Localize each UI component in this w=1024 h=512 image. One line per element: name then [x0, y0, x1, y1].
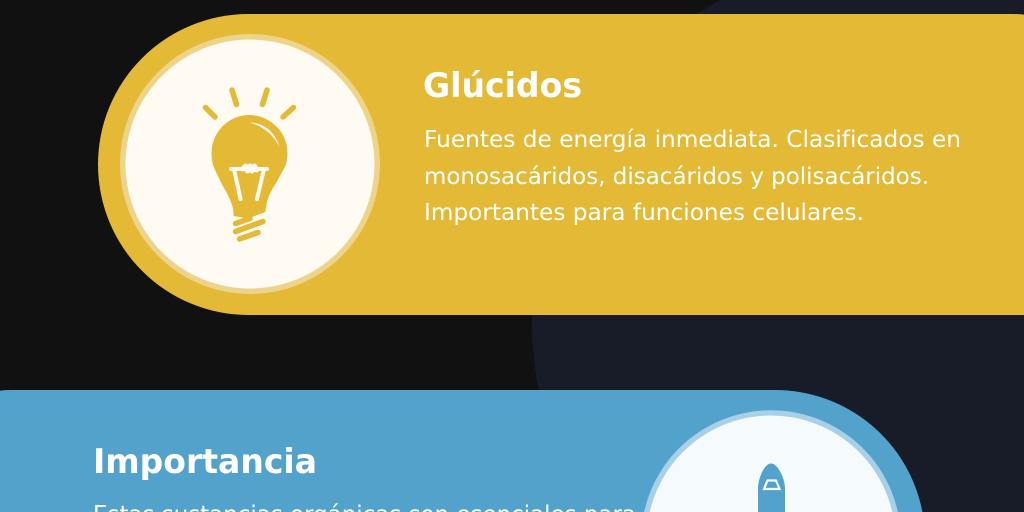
body text: glúcidos: Fuentes de energía inmediata. Clasificados en: [424, 127, 961, 153]
body text: glúcidos: Importantes para funciones celulares.: [424, 200, 864, 226]
yellow pill band: [98, 14, 1024, 315]
bulb rays: [206, 90, 294, 117]
background dark circle: [532, 0, 1024, 512]
body text: glúcidos: [424, 127, 961, 226]
rocket window: [764, 480, 780, 489]
body text: glúcidos: monosacáridos, disacáridos y polisacáridos.: [424, 164, 929, 190]
medallion ring: [644, 410, 898, 512]
bulb screw threads: [236, 218, 263, 239]
bulb glass: [212, 115, 288, 218]
bulb highlight: [250, 122, 280, 148]
rocket body: [758, 464, 785, 512]
medallion ring: [120, 34, 380, 294]
panel: glúcidos: [98, 14, 1024, 315]
icon: light bulb medallion: [120, 34, 380, 294]
heading: Importancia: Importancia: [93, 442, 317, 482]
heading: Glúcidos: Glúcidos: [423, 66, 582, 106]
icon: rocket medallion: [644, 410, 898, 512]
medallion disc: [126, 40, 374, 288]
medallion disc: [650, 416, 892, 512]
blue pill band: [0, 390, 922, 512]
panel: importancia: [0, 390, 922, 512]
bulb filament: [231, 166, 267, 199]
